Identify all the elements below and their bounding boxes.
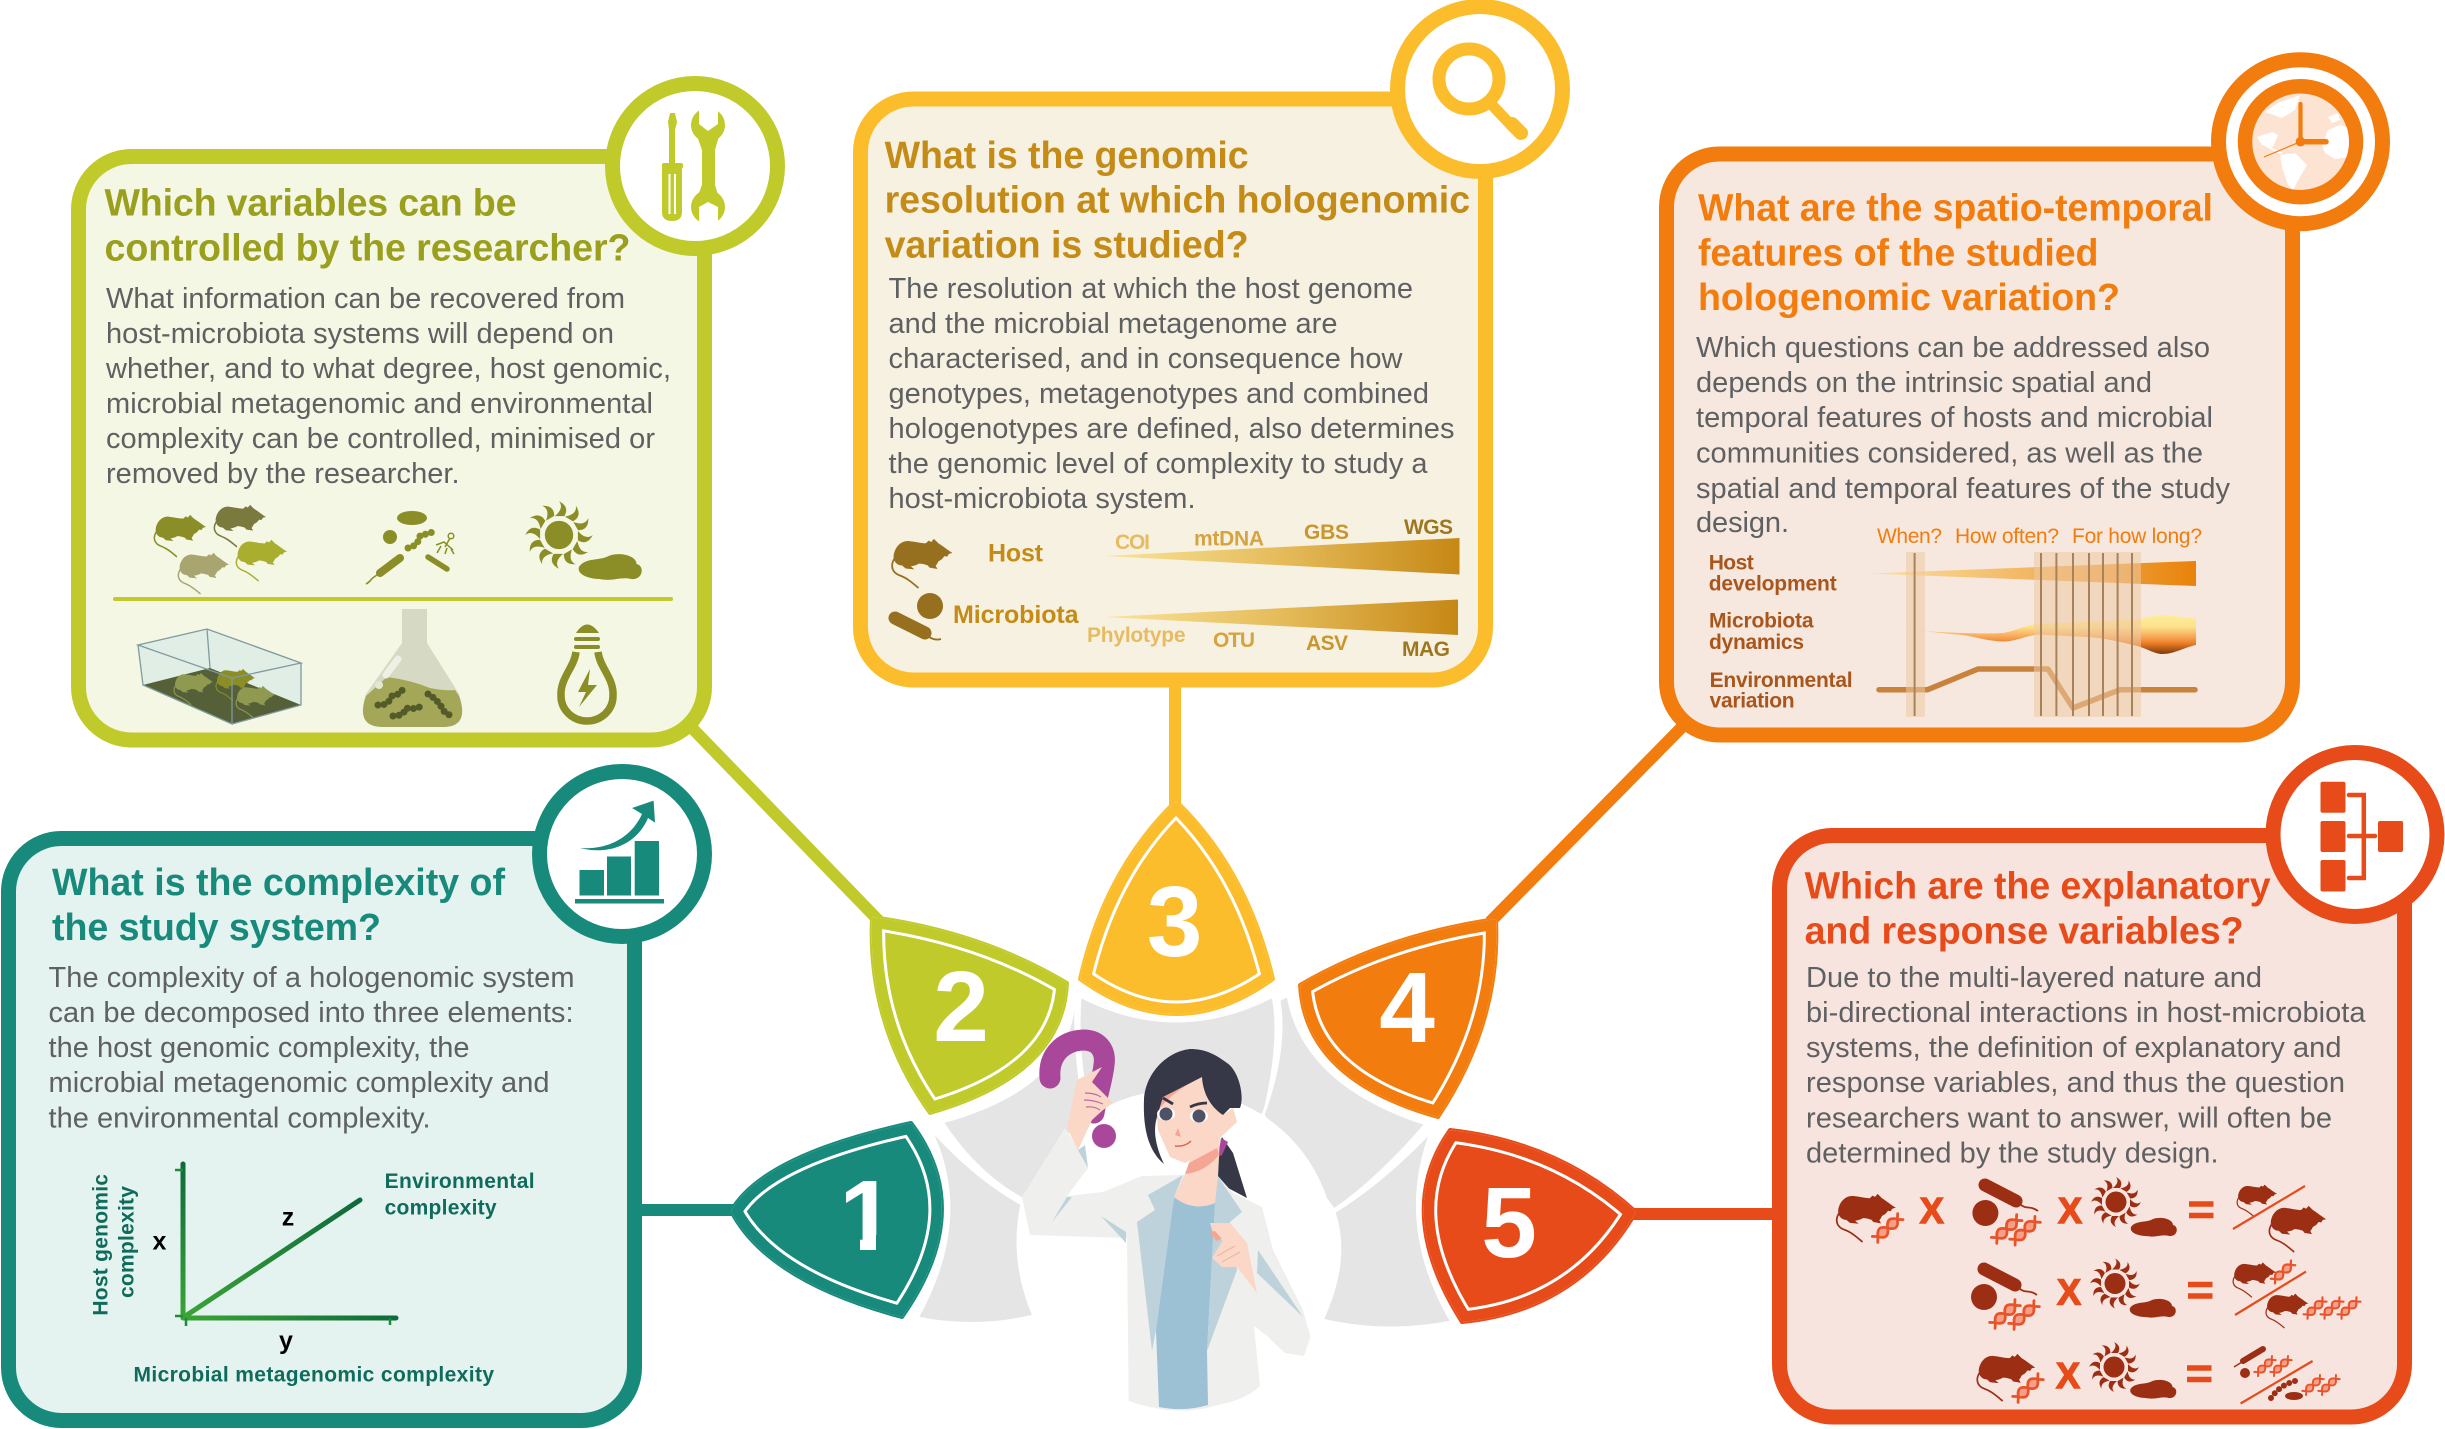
- body text: can be decomposed into three elements:: [48, 997, 574, 1029]
- equation row 1: X: [1920, 1190, 1944, 1231]
- heading: features of the studied: [1698, 232, 2098, 274]
- body text: Due to the multi-layered nature and: [1806, 962, 2262, 994]
- body text: spatial and temporal features of the study: [1696, 473, 2230, 505]
- icon: mice in a cage: [138, 629, 301, 724]
- chart: three complexity axes: complexity: [116, 1186, 138, 1298]
- equation row 3: X: [2056, 1355, 2080, 1396]
- body text: the host genomic complexity, the: [48, 1032, 470, 1064]
- chart: sampling over host, microbiota and environment: dynamics: [1709, 631, 1804, 654]
- microbiota row with resolution wedge: Microbiota: [953, 601, 1080, 629]
- chart: three complexity axes: y: [279, 1327, 293, 1355]
- microbiota row with resolution wedge: ASV: [1306, 632, 1348, 655]
- connector: badge 4 to panel 4: [1490, 725, 1684, 922]
- panel 2: controllable variables: [78, 84, 778, 740]
- body text: and the microbial metagenome are: [888, 308, 1338, 340]
- panel frame: [8, 838, 634, 1420]
- lab coat: [1022, 1128, 1310, 1411]
- connector: badge 2 to panel 2: [692, 728, 880, 922]
- panel frame: [78, 156, 704, 740]
- microbiota row with resolution wedge: [895, 593, 1458, 661]
- host row with resolution wedge: GBS: [1304, 521, 1349, 544]
- chart: sampling over host, microbiota and environment: When?: [1877, 525, 1942, 548]
- body text: design.: [1696, 507, 1789, 539]
- heading: What are the spatio-temporal: [1698, 186, 2213, 228]
- chart: sampling over host, microbiota and environment: Host: [1709, 552, 1754, 574]
- body text: [48, 962, 574, 1134]
- chart: sampling over host, microbiota and environment: Environmental: [1710, 669, 1853, 692]
- chart: three complexity axes: Host genomic: [90, 1174, 113, 1316]
- scientist with question mark: [1022, 1040, 1310, 1411]
- body text: characterised, and in consequence how: [888, 343, 1404, 375]
- badge 1: [731, 1123, 942, 1317]
- heading: What is the complexity of: [52, 861, 505, 903]
- icon: growth chart: [540, 772, 704, 936]
- lapels: [1137, 1175, 1242, 1351]
- icon: magnifying glass: [1398, 6, 1562, 172]
- body text: researchers want to answer, will often be: [1806, 1102, 2332, 1134]
- chart: sampling over host, microbiota and environment: Microbiota: [1709, 610, 1814, 633]
- body text: hologenotypes are defined, also determines: [888, 413, 1454, 445]
- hair: [1144, 1049, 1242, 1164]
- host row with resolution wedge: WGS: [1404, 516, 1453, 539]
- host row with resolution wedge: Host: [988, 540, 1044, 568]
- badge 3: [1080, 801, 1273, 1014]
- number 2: 2: [933, 951, 989, 1063]
- chart: sampling over host, microbiota and environment: development: [1709, 572, 1837, 596]
- icon: light bulb: [561, 624, 613, 721]
- body text: response variables, and thus the question: [1806, 1067, 2345, 1099]
- body text: microbial metagenomic and environmental: [106, 388, 653, 420]
- host row with resolution wedge: COI: [1115, 531, 1150, 554]
- body text: complexity can be controlled, minimised or: [106, 423, 655, 455]
- number 5: 5: [1481, 1167, 1537, 1279]
- other hand: [1210, 1223, 1257, 1293]
- microbiota row with resolution wedge: Phylotype: [1087, 624, 1186, 647]
- icon: screwdriver and wrench: [612, 84, 778, 248]
- icon: sun and soil: [525, 501, 642, 580]
- heading: and response variables?: [1805, 910, 2244, 952]
- microbiota row with resolution wedge: OTU: [1213, 629, 1255, 652]
- host row with resolution wedge: mtDNA: [1194, 528, 1264, 550]
- panel frame: [860, 99, 1486, 680]
- heading: [1698, 186, 2213, 318]
- number 3: 3: [1147, 866, 1202, 978]
- equation row 2: X: [2057, 1272, 2081, 1312]
- chart: three complexity axes: Microbial metagenomic complexity: [134, 1364, 494, 1386]
- central white circle: [1019, 1090, 1335, 1406]
- badge 2: [872, 917, 1067, 1113]
- icon: variable flow diagram: [2273, 752, 2437, 916]
- shirt: [1156, 1197, 1215, 1409]
- microbiota row with resolution wedge: MAG: [1402, 638, 1450, 661]
- number 4: 4: [1379, 952, 1435, 1064]
- body text: The resolution at which the host genome: [888, 273, 1413, 305]
- heading: hologenomic variation?: [1698, 276, 2120, 318]
- chart: sampling over host, microbiota and environment: variation: [1710, 690, 1795, 712]
- icon: microbes: [366, 511, 454, 584]
- face: [1157, 1077, 1237, 1163]
- body text: depends on the intrinsic spatial and: [1696, 367, 2152, 399]
- body text: The complexity of a hologenomic system: [48, 962, 574, 994]
- divider: [113, 597, 673, 601]
- body text: genotypes, metagenotypes and combined: [888, 378, 1429, 410]
- heading: What is the genomic: [885, 134, 1249, 176]
- equation row 1: [1837, 1177, 2326, 1252]
- icon: four mice: [154, 505, 287, 594]
- body text: [1806, 962, 2366, 1170]
- body text: microbial metagenomic complexity and: [48, 1067, 550, 1099]
- chart: three complexity axes: x: [153, 1228, 167, 1256]
- heading: Which are the explanatory: [1805, 864, 2271, 906]
- panel 1: complexity of the study system: [8, 772, 704, 1420]
- chart: sampling over host, microbiota and environment: For how long?: [2072, 525, 2202, 548]
- body text: temporal features of hosts and microbial: [1696, 402, 2213, 434]
- body text: [1696, 332, 2230, 539]
- body text: the environmental complexity.: [48, 1102, 430, 1134]
- body text: systems, the definition of explanatory and: [1806, 1032, 2342, 1064]
- question mark: [1050, 1040, 1116, 1148]
- heading: [104, 182, 630, 268]
- body text: removed by the researcher.: [106, 458, 460, 490]
- body text: host-microbiota systems will depend on: [106, 318, 614, 350]
- heading: [52, 861, 505, 948]
- chart: three complexity axes: [90, 1164, 535, 1386]
- coat shadows: [1052, 1145, 1303, 1317]
- panel 3: genomic resolution: [860, 6, 1562, 680]
- body text: [105, 283, 671, 490]
- connector: badge 1 to panel 1: [640, 1204, 735, 1216]
- panel frame: [1780, 836, 2404, 1417]
- host row with resolution wedge: [892, 516, 1460, 588]
- number 1: 1: [839, 1160, 895, 1272]
- chart: three complexity axes: complexity: [385, 1196, 497, 1220]
- panel frame: [1666, 154, 2292, 735]
- connector: badge 3 to panel 3: [1169, 685, 1181, 805]
- body text: determined by the study design.: [1806, 1138, 2218, 1170]
- neck: [1174, 1137, 1220, 1206]
- body text: communities considered, as well as the: [1696, 437, 2203, 469]
- equation row 3: [1977, 1342, 2340, 1404]
- icon: clock over globe: [2218, 60, 2382, 224]
- badge 4: [1300, 919, 1496, 1117]
- central grey fan: [917, 995, 1452, 1328]
- chart: three complexity axes: z: [282, 1204, 294, 1232]
- connector: badge 5 to panel 5: [1630, 1208, 1775, 1220]
- equation row 1: X: [2058, 1190, 2082, 1231]
- body text: Which questions can be addressed also: [1696, 332, 2210, 364]
- ponytail: [1217, 1137, 1247, 1198]
- body text: bi-directional interactions in host-microbiota: [1806, 997, 2366, 1029]
- raised hand: [1067, 1067, 1113, 1150]
- equation row 2: [1971, 1258, 2361, 1330]
- body text: What information can be recovered from: [106, 283, 625, 315]
- panel 4: spatio-temporal features: [1666, 60, 2382, 735]
- body text: [888, 273, 1454, 515]
- icon: culture flask: [363, 609, 462, 727]
- body text: the genomic level of complexity to study a: [888, 448, 1428, 480]
- eyes and brows: [1157, 1098, 1208, 1146]
- chart: sampling over host, microbiota and environment: [1709, 525, 2202, 717]
- body text: host-microbiota system.: [888, 483, 1196, 515]
- body text: whether, and to what degree, host genomic,: [105, 353, 671, 385]
- panel 5: explanatory and response variables: [1780, 752, 2437, 1417]
- chart: sampling over host, microbiota and environment: How often?: [1955, 525, 2059, 548]
- heading: variation is studied?: [885, 224, 1249, 266]
- heading: Which variables can be: [104, 182, 516, 224]
- heading: controlled by the researcher?: [104, 226, 630, 268]
- chart: three complexity axes: Environmental: [385, 1170, 535, 1193]
- badge 5: [1424, 1130, 1636, 1322]
- heading: [1805, 864, 2271, 952]
- heading: resolution at which hologenomic: [885, 178, 1470, 220]
- heading: the study system?: [52, 906, 381, 948]
- heading: [885, 134, 1470, 266]
